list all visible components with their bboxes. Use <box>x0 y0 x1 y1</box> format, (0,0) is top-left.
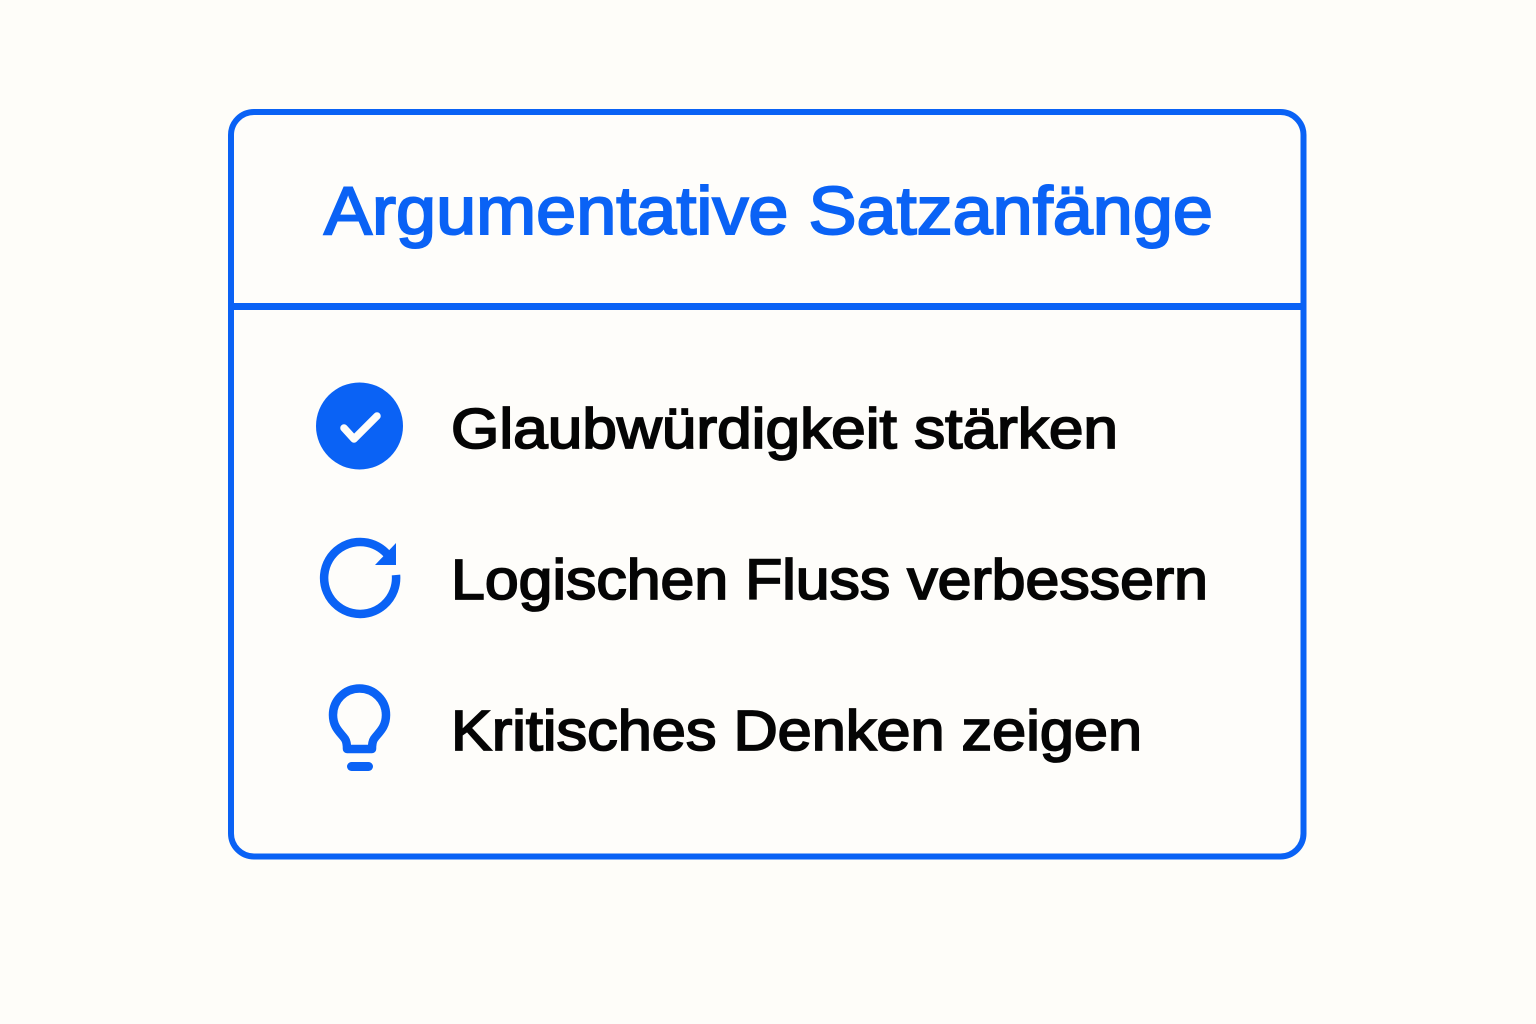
label: Logischen Fluss verbessern <box>451 548 1208 612</box>
panel: card <box>231 112 1304 856</box>
label: Kritisches Denken zeigen <box>451 699 1142 763</box>
icon: check circle <box>316 382 403 470</box>
list item: Glaubwürdigkeit <box>316 382 1118 470</box>
icon: refresh arrow <box>324 542 396 614</box>
icon: light bulb <box>333 688 386 771</box>
list item: Kritisches Denken <box>333 688 1142 771</box>
label: Glaubwürdigkeit stärken <box>451 397 1118 461</box>
list item: Logischer Fluss <box>324 542 1208 614</box>
heading: Argumentative Satzanfänge <box>324 173 1213 249</box>
